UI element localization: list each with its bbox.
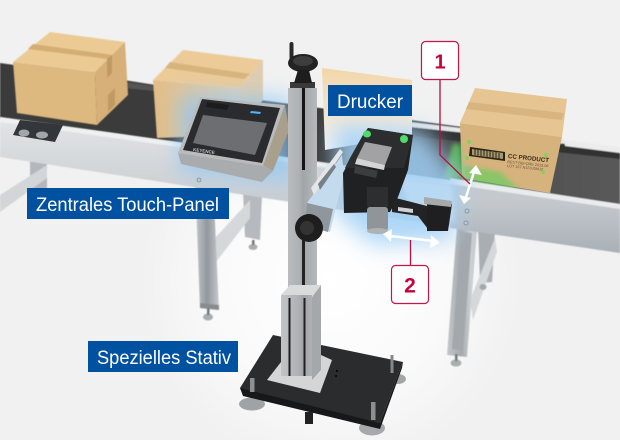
box 4 with printed code — [460, 88, 567, 193]
lit frame section below printer — [400, 178, 455, 222]
conveyor legs — [0, 158, 497, 366]
label: Spezielles Stativ: Spezielles Stativ — [97, 347, 231, 369]
conveyor frame — [0, 117, 620, 253]
box 2 — [153, 50, 263, 138]
product text: LOT 167 N1F0J0M10 — [507, 164, 543, 172]
base plate — [239, 335, 406, 436]
product text: CC PRODUCT — [508, 153, 550, 164]
printer — [343, 128, 452, 234]
callout 2 — [392, 240, 428, 304]
label: Zentrales Touch-Panel: Zentrales Touch-Panel — [36, 194, 219, 216]
arrow 2: white double arrow — [383, 229, 440, 248]
brand name: KEYENCE — [193, 147, 215, 155]
printer arm and head — [392, 197, 452, 231]
callout 1 — [422, 42, 470, 184]
front left pin — [250, 378, 254, 392]
adjustment block and clamp knob — [295, 149, 344, 242]
printer body — [343, 128, 413, 213]
nozzle cylinder — [367, 187, 388, 234]
label: Spezielles Stativ — [88, 341, 238, 372]
callout 1: 1 — [434, 52, 446, 74]
barcode — [469, 147, 505, 161]
box 1 — [13, 32, 128, 125]
touch screen — [193, 115, 267, 155]
stand column — [288, 82, 317, 288]
label: Zentrales Touch-Panel — [27, 188, 229, 219]
status light — [250, 111, 261, 114]
knob on column top — [288, 42, 318, 83]
green inspection light — [443, 143, 520, 192]
roller cutout in frame — [13, 120, 63, 142]
print module — [357, 142, 392, 165]
front left foot disc — [239, 398, 265, 410]
arrow 1: white double arrow — [459, 165, 482, 204]
frame screw holes — [197, 178, 469, 225]
product text — [507, 153, 550, 172]
label: Drucker — [328, 85, 412, 116]
status LEDs — [363, 130, 408, 143]
glow behind touch panel — [180, 95, 298, 182]
touch panel — [178, 97, 289, 182]
product text: BEST BEFORE 2019.08 — [507, 160, 549, 168]
mounting hole and bracket — [305, 370, 338, 424]
glow behind printer — [335, 125, 462, 245]
label: Drucker: Drucker — [337, 91, 403, 113]
green marker dots — [465, 140, 548, 174]
box 3 behind printer — [322, 68, 412, 150]
front right pin — [371, 402, 376, 420]
conveyor belt — [0, 63, 620, 205]
front right foot disc — [359, 420, 385, 436]
stand sleeve and steel base plate — [267, 285, 332, 393]
rear foot — [390, 374, 406, 384]
callout 2: 2 — [404, 274, 416, 298]
